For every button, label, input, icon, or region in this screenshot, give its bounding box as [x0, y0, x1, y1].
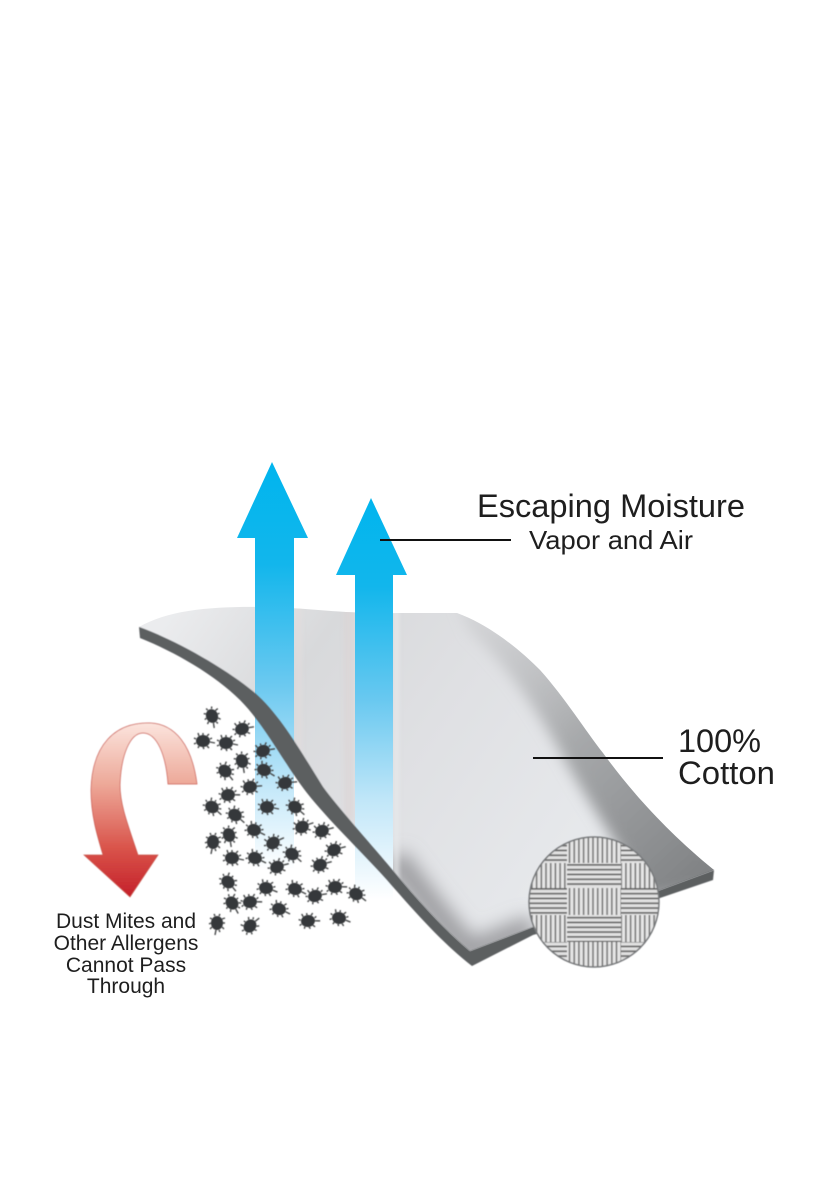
woven fabric magnifier — [525, 830, 663, 972]
label: 100% cotton — [678, 723, 775, 791]
label: escaping moisture: Escaping Moisture — [477, 488, 745, 524]
leader line: escaping moisture — [380, 539, 511, 541]
label: dust mites: Cannot Pass — [66, 954, 186, 977]
label: dust mites: Other Allergens — [54, 932, 198, 955]
big blue arrow — [237, 462, 308, 868]
small blue arrow — [336, 498, 407, 900]
sheet thick edge — [139, 627, 714, 966]
sheet top surface — [139, 607, 714, 951]
label: 100% cotton: Cotton — [678, 755, 775, 791]
label: vapor and air: Vapor and Air — [529, 525, 693, 555]
red curved arrow — [84, 723, 197, 897]
fabric sheet illustration — [139, 600, 740, 951]
dust mites cluster — [194, 705, 370, 938]
label: dust mites — [54, 910, 198, 998]
leader line: cotton — [533, 757, 663, 759]
label: dust mites: Through — [87, 975, 165, 998]
label: dust mites: Dust Mites and — [56, 910, 196, 933]
label: 100% cotton: 100% — [678, 723, 761, 759]
